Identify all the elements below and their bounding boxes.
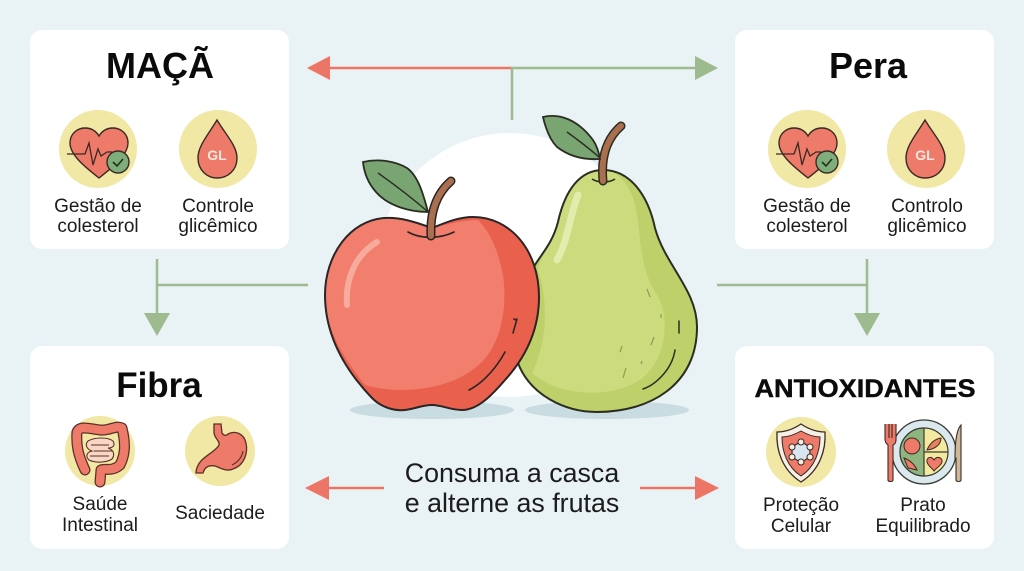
label: controle glicêmico: glicêmico [178,216,258,237]
icon: blood drop GL [179,110,257,188]
label: proteção celular: Proteção [763,495,839,516]
arrow: bottom red to the left [305,476,384,500]
heading: maçã: MAÇÃ [106,44,214,86]
apple illustration [325,160,539,410]
icon: heart with check [59,110,137,188]
icon: blood drop GL: GL [915,147,935,163]
label: saúde intestinal: Intestinal [62,515,138,536]
label: prato equilibrado: Prato [900,495,946,516]
icon: shield [766,417,836,487]
label: controlo glicêmico: glicêmico [887,216,967,237]
arrow: bottom red to the right [640,476,719,500]
pear illustration [518,116,697,412]
label: controlo glicêmico: Controlo [891,196,963,217]
callout: consuma a casca: e alterne as frutas [405,488,619,518]
label: gestão de colesterol: Gestão de [763,196,851,217]
apple stem [431,181,451,236]
fruit shadows [350,401,689,419]
apple leaf [363,160,428,212]
panel: pera [735,30,994,249]
icon: heart with check [768,110,846,188]
label: controle glicêmico: Controle [182,196,254,217]
label: proteção celular: Celular [771,516,832,537]
label: saciedade: Saciedade [175,503,265,524]
panel: fibra [30,346,289,549]
icon: blood drop GL [887,110,965,188]
arrow: top green to the right [512,56,718,120]
callout: consuma a casca: Consuma a casca [405,458,619,488]
icon: intestine [65,416,135,486]
label: saúde intestinal: Saúde [73,494,127,515]
arrow: top red to the left [307,56,512,80]
icon: blood drop GL: GL [207,147,227,163]
label: gestão de colesterol: colesterol [766,216,848,237]
backdrop circle [378,133,642,397]
panel: maçã [30,30,289,249]
heading: pera: Pera [829,45,908,86]
label: prato equilibrado: Equilibrado [875,516,971,537]
arrow: green down to antioxidantes [717,259,880,336]
pear stem [603,126,621,181]
label: gestão de colesterol: Gestão de [54,196,142,217]
pear leaf [543,116,600,159]
icon: balanced plate [885,420,961,484]
panel: antioxidantes [735,346,994,549]
heading: antioxidantes: ANTIOXIDANTES [754,375,976,403]
heading: fibra: Fibra [116,366,202,405]
label: gestão de colesterol: colesterol [57,216,139,237]
arrow: green down to fibra [144,259,308,336]
icon: stomach [185,416,255,486]
